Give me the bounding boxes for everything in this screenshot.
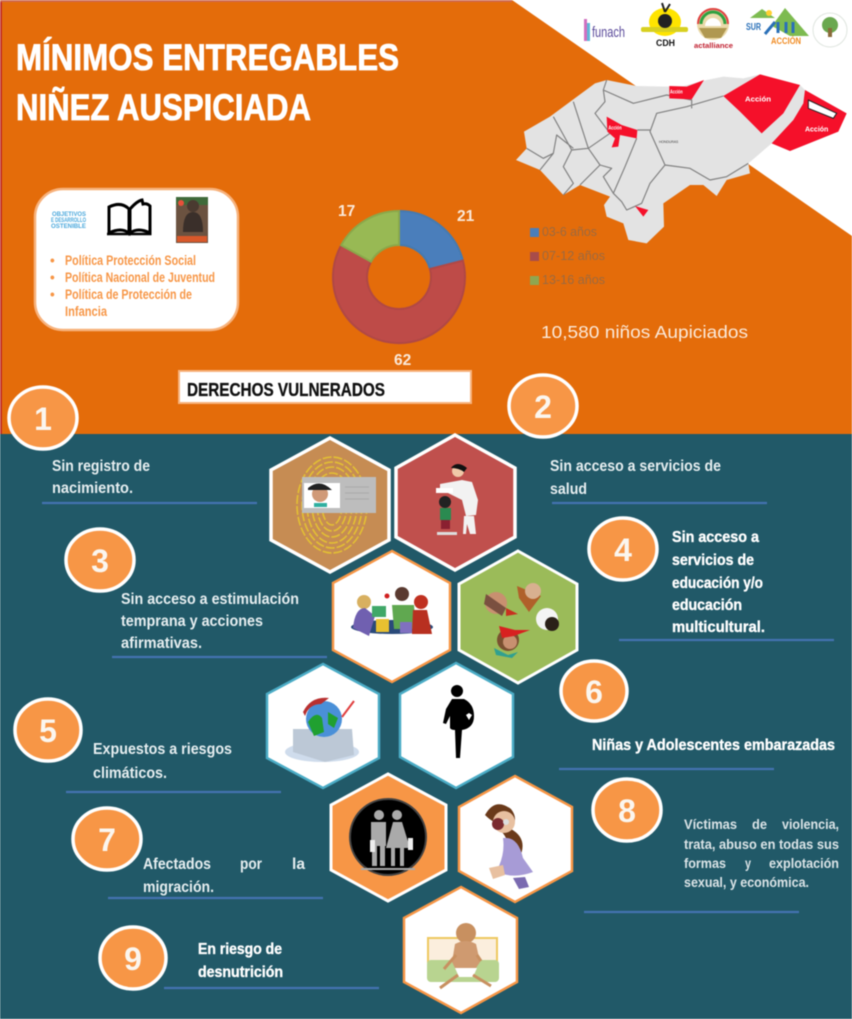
- text 2: salud: [550, 481, 587, 498]
- text 4: educación: [672, 597, 742, 614]
- icon: book: [107, 200, 151, 234]
- map labels: Acción: [670, 89, 683, 95]
- badge 9: 9: [124, 941, 142, 977]
- text 8: de: [752, 817, 767, 832]
- logo: actalliance: actalliance: [694, 41, 733, 50]
- text 3: afirmativas.: [121, 635, 202, 652]
- map labels: Acción: [805, 125, 829, 134]
- text 2: [550, 458, 721, 498]
- text 5: [93, 741, 232, 782]
- logo: tree seal: [813, 13, 847, 47]
- text 5: climáticos.: [93, 765, 167, 782]
- icon: ODS logo: OBJETIVOS: [52, 211, 87, 218]
- policy list: Política de Protección de: [65, 287, 192, 302]
- legend: [530, 224, 605, 287]
- text 1: Sin registro de: [52, 458, 150, 475]
- heading: derechos vulnerados: DERECHOS VULNERADOS: [187, 380, 385, 400]
- text 8: violencia,: [782, 817, 839, 832]
- lagoon: [808, 100, 837, 118]
- item 8: violencia: [459, 776, 839, 912]
- text 8: [684, 817, 839, 890]
- policy list: Política Protección Social: [65, 253, 196, 268]
- icon: ODS logo: E DESARROLLO: [51, 217, 86, 224]
- legend: 13-16 años: [542, 272, 605, 287]
- logo: funach: [584, 19, 625, 41]
- badge 9: [100, 927, 166, 989]
- text 9: desnutrición: [198, 964, 283, 981]
- policy list: •: [50, 287, 55, 302]
- hexagon: hurt girl: [459, 776, 572, 902]
- teal lower background: [0, 434, 852, 1019]
- text 8: sexual, y económica.: [684, 875, 809, 890]
- text 4: Sin acceso a: [672, 529, 759, 546]
- text 3: [121, 591, 299, 652]
- text 8: y: [745, 856, 751, 871]
- text 1: nacimiento.: [52, 480, 133, 497]
- highlighted departments: [607, 74, 847, 217]
- badge 3: [66, 529, 134, 591]
- donut values: [338, 203, 475, 369]
- item 6: embarazadas: [400, 661, 835, 788]
- donut chart: [333, 211, 465, 343]
- hexagon: doctor: [396, 435, 515, 570]
- department borders: [527, 80, 748, 210]
- badge 3: 3: [91, 543, 109, 579]
- policy list: •: [50, 270, 55, 285]
- policy list: [50, 253, 215, 319]
- text 7: Afectados: [143, 856, 211, 873]
- top border: [0, 0, 512, 2]
- hexagon: children playing: [333, 551, 450, 682]
- icon: ODS logo: [51, 211, 87, 230]
- map of Honduras: [516, 74, 847, 243]
- text 7: por: [240, 856, 262, 873]
- text 9: En riesgo de: [198, 941, 282, 958]
- item 4: educacion: [459, 518, 834, 683]
- item 7: migracion: [73, 774, 446, 901]
- policy list: Política Nacional de Juventud: [65, 270, 215, 285]
- orange header background: [0, 0, 852, 434]
- title: [16, 36, 399, 128]
- text 7: migración.: [143, 879, 214, 896]
- text 8: explotación: [769, 856, 839, 871]
- logo: CDH: [641, 3, 688, 48]
- item 3: estimulacion: [66, 529, 450, 682]
- image: report cover: [176, 197, 208, 243]
- map outline: [516, 74, 847, 243]
- text 4: educación y/o: [672, 575, 763, 592]
- segment 62: [333, 245, 465, 343]
- logo: funach: funach: [592, 24, 625, 41]
- hexagon: malnourished baby: [404, 887, 517, 1013]
- left border: [0, 0, 2, 434]
- logo: Sur en Acción: [746, 8, 809, 46]
- segment 17: [341, 211, 399, 262]
- policy list: •: [50, 253, 55, 268]
- badge 5: [15, 699, 81, 761]
- text 4: multicultural.: [672, 619, 765, 636]
- text 9: [198, 941, 283, 981]
- donut values: 21: [457, 208, 475, 225]
- text 8: trata, abuso en todas sus: [684, 837, 839, 852]
- badge 8: [593, 779, 661, 841]
- text 3: temprana y acciones: [121, 613, 263, 630]
- panel background: [35, 189, 238, 330]
- badge 7: [73, 808, 141, 870]
- title: NIÑEZ AUSPICIADA: [16, 86, 311, 128]
- text 2: Sin acceso a servicios de: [550, 458, 721, 475]
- map labels: Acción: [608, 125, 622, 131]
- hexagon: multicultural children: [459, 551, 577, 683]
- badge 2: 2: [534, 389, 552, 425]
- hexagon: fingerprint: [271, 438, 389, 572]
- badge 5: 5: [39, 713, 57, 749]
- hexagon: pregnant woman: [400, 663, 513, 788]
- donut values: 17: [338, 203, 355, 220]
- badge 1: 1: [34, 401, 52, 437]
- donut values: 62: [394, 352, 411, 369]
- segment 21: [399, 211, 463, 269]
- badge 4: [589, 518, 657, 580]
- badge 6: 6: [585, 674, 603, 710]
- text 3: Sin acceso a estimulación: [121, 591, 299, 608]
- text 8: formas: [684, 856, 726, 871]
- policy list: Infancia: [65, 304, 107, 319]
- panel: policies: [35, 189, 238, 330]
- text 4: servicios de: [672, 552, 754, 569]
- white corner triangle: [512, 0, 852, 236]
- badge 7: 7: [98, 822, 116, 858]
- logo: Sur en Acción: ACCIÓN: [771, 35, 801, 46]
- hexagon: earth on ice: [267, 664, 379, 788]
- country label: HONDURAS: [659, 140, 679, 144]
- total children: 10,580 niños Aupiciados: [541, 322, 748, 342]
- legend: 07-12 años: [542, 248, 605, 263]
- item 9: desnutricion: [100, 887, 517, 1013]
- item 2: salud: [396, 375, 767, 570]
- logo: actalliance: [694, 8, 733, 50]
- text 7: la: [292, 856, 305, 873]
- map labels: [608, 89, 829, 134]
- map labels: Acción: [745, 95, 772, 104]
- text 8: Víctimas: [684, 817, 737, 832]
- badge 6: [561, 661, 627, 721]
- text 7: [143, 856, 305, 896]
- item 5: clima: [15, 664, 379, 792]
- badge 2: [509, 375, 577, 437]
- heading: derechos vulnerados: [179, 371, 471, 403]
- badge 1: [9, 387, 77, 449]
- text 1: [52, 458, 150, 497]
- item 1: registro: [9, 387, 389, 572]
- badge 8: 8: [618, 793, 636, 829]
- title: MÍNIMOS ENTREGABLES: [16, 36, 399, 78]
- logo: CDH: CDH: [656, 38, 675, 48]
- icon: ODS logo: OSTENIBLE: [51, 223, 87, 230]
- badge 4: 4: [614, 532, 632, 568]
- partner logos: [584, 3, 847, 50]
- logo: Sur en Acción: SUR: [746, 22, 762, 33]
- text 5: Expuestos a riesgos: [93, 741, 232, 758]
- text 4: [672, 529, 765, 636]
- hexagon: migrants icon: [331, 774, 446, 901]
- legend: 03-6 años: [542, 224, 597, 239]
